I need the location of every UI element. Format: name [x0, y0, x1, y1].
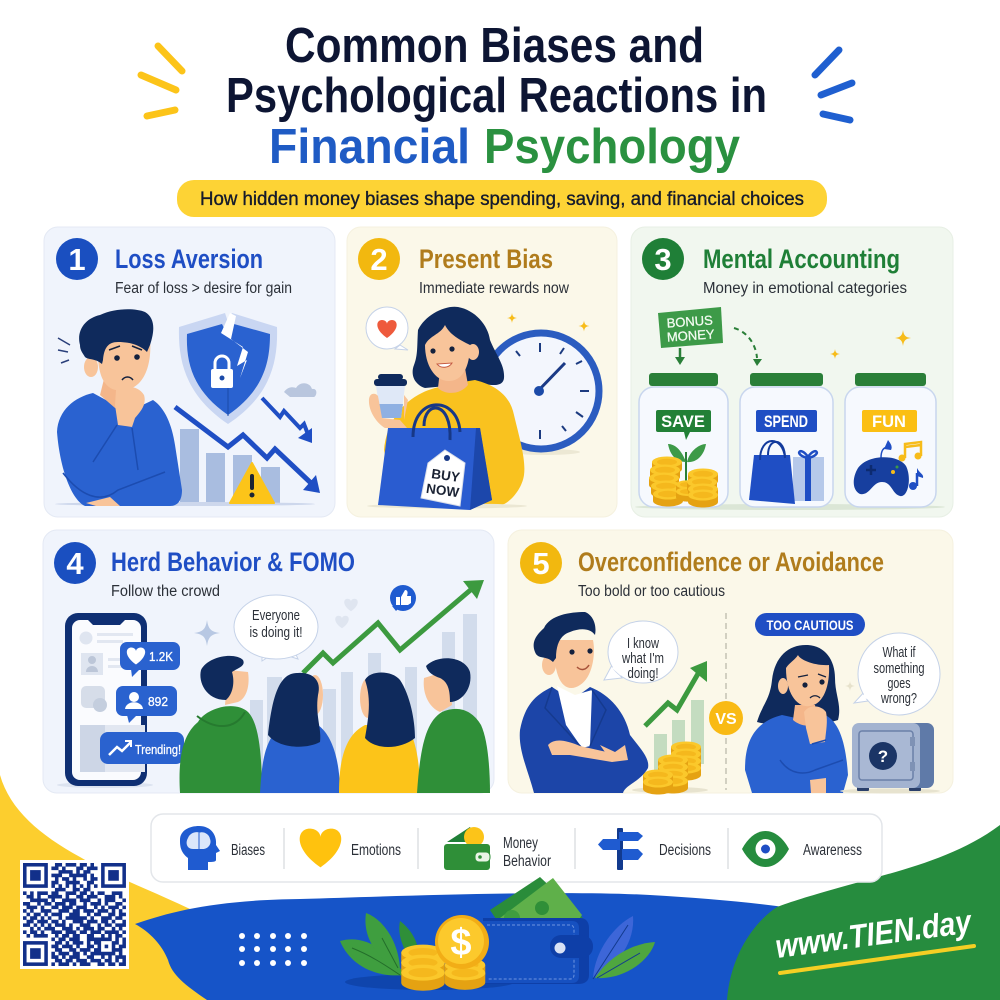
icon: faint sparkle	[845, 681, 855, 691]
icon: phone	[57, 613, 153, 788]
icon: sparkle	[194, 620, 220, 646]
number badge 1	[56, 238, 98, 280]
ground line	[55, 502, 315, 506]
title: Psychology	[484, 120, 740, 174]
text: follow the crowd: Follow the crowd	[111, 583, 220, 600]
icon: buy now tag: BUY	[430, 466, 461, 485]
sign: bonus money: MONEY	[666, 326, 715, 345]
subtitle pill: How hidden money biases shape spending, saving, and financial choices	[200, 189, 804, 210]
badge: likes 1.2K: 1.2K	[149, 649, 173, 664]
subtitle pill	[177, 180, 827, 217]
divider dashed	[725, 613, 727, 790]
decorative yellow burst icon	[141, 46, 182, 116]
icon: like bubble	[390, 585, 416, 611]
bottom band: blue wave	[135, 893, 790, 1000]
callout: i know what i'm doing: what I'm	[621, 651, 664, 667]
person: blue woman	[260, 673, 340, 793]
text: money behavior: Money	[503, 835, 538, 852]
icon: warning triangle	[230, 463, 274, 503]
badge: vs: VS	[715, 711, 737, 728]
panel: present bias	[347, 227, 617, 517]
heading: mental accounting: Mental Accounting	[703, 244, 900, 274]
icon: brain head	[180, 826, 220, 870]
callout: what if something goes wrong: wrong?	[880, 691, 917, 707]
icon: safe	[840, 723, 940, 794]
badge: trending	[100, 732, 184, 764]
callout: everyone is doing it: is doing it!	[250, 625, 302, 641]
number badge 2: 2	[370, 242, 388, 277]
number badge 2	[358, 238, 400, 280]
icon: gold coins	[401, 915, 489, 991]
arrow: bonus down	[675, 348, 685, 365]
icon: worry marks	[58, 338, 70, 363]
icon: buy now tag: NOW	[425, 481, 460, 500]
icon: shopping bag	[367, 405, 527, 510]
icon: heart	[300, 829, 341, 867]
person: yellow woman	[339, 672, 420, 793]
number badge 3	[642, 238, 684, 280]
bars	[250, 614, 477, 793]
text: biases: Biases	[231, 842, 265, 859]
icon: sparkles	[507, 313, 590, 332]
icon: left leaves	[340, 913, 515, 990]
bottom band: green wave	[727, 825, 1000, 1000]
badge: vs	[709, 701, 743, 735]
number badge 1: 1	[68, 242, 86, 277]
decorative blue burst icon	[815, 50, 852, 120]
icon: green wallet	[444, 827, 490, 870]
website url: www.TIEN.day	[773, 902, 975, 965]
text: emotions: Emotions	[351, 842, 401, 859]
number badge 3: 3	[654, 242, 672, 277]
person: woman with coffee	[384, 307, 524, 505]
text: fear of loss: Fear of loss > desire for gain	[115, 280, 292, 297]
icon: buy now tag	[421, 450, 465, 506]
url underline	[780, 946, 974, 973]
icon: eye	[742, 831, 789, 867]
icon: sparkles	[830, 330, 911, 359]
legend bar	[151, 814, 882, 882]
jar: spend	[740, 373, 833, 507]
jar: spend: SPEND	[764, 413, 808, 431]
icon: heart bubble	[366, 307, 408, 350]
heading: loss aversion: Loss Aversion	[115, 244, 263, 274]
panel: overconfidence or avoidance	[508, 530, 953, 794]
panel: herd behavior	[43, 530, 494, 793]
people: crowd	[180, 656, 490, 793]
title: Psychological Reactions in	[226, 69, 767, 123]
badge: followers 892: 892	[148, 694, 168, 709]
icon: gold coins: $	[450, 922, 472, 964]
callout: what if something goes wrong	[854, 633, 940, 715]
icon: coin stacks	[632, 742, 708, 794]
number badge 4: 4	[66, 546, 84, 581]
badge: followers 892	[116, 686, 177, 723]
bars	[180, 429, 280, 503]
jar: fun	[845, 373, 936, 507]
text: awareness: Awareness	[803, 842, 862, 859]
decorative dots	[239, 933, 307, 966]
arrow: dashed curve	[734, 328, 762, 366]
callout: what if something goes wrong: What if	[882, 645, 916, 661]
title: Common Biases and	[285, 19, 704, 73]
person: green man right	[417, 658, 490, 793]
heading: herd behavior: Herd Behavior & FOMO	[111, 547, 355, 577]
badge: likes 1.2K	[120, 642, 180, 677]
title	[226, 19, 767, 174]
bottom band: yellow wave	[0, 775, 260, 1000]
icon: small hearts	[335, 599, 358, 628]
person: worried man	[57, 309, 182, 506]
text: too bold or too cautious: Too bold or too cautious	[578, 583, 725, 600]
pill: too cautious: TOO CAUTIOUS	[766, 618, 854, 633]
sign: bonus money: BONUS	[666, 312, 714, 331]
bars	[654, 700, 704, 778]
jar: save: SAVE	[661, 413, 705, 431]
title: Financial	[269, 120, 470, 174]
arrow: rising green	[645, 661, 707, 726]
callout: i know what i'm doing	[604, 621, 678, 683]
icon: cloud	[284, 383, 316, 397]
text: money behavior: Behavior	[503, 853, 551, 870]
callout: everyone is doing it	[234, 595, 318, 661]
arrow: big falling	[175, 407, 320, 493]
jar: save	[639, 373, 728, 508]
callout: i know what i'm doing: doing!	[628, 666, 658, 682]
callout: everyone is doing it: Everyone	[252, 608, 300, 624]
arrow: rising green	[303, 580, 484, 673]
number badge 5	[520, 542, 562, 584]
icon: coffee cup	[369, 374, 408, 428]
heading: present bias: Present Bias	[419, 244, 553, 274]
callout: i know what i'm doing: I know	[627, 636, 659, 652]
icon: broken shield	[179, 313, 277, 424]
pill: too cautious	[755, 613, 865, 636]
text: immediate rewards: Immediate rewards now	[419, 280, 570, 297]
text: decisions: Decisions	[659, 842, 711, 859]
text: money behavior	[503, 835, 551, 870]
icon: signpost	[598, 828, 643, 870]
text: money in emotional categories: Money in emotional categories	[703, 280, 907, 297]
icon: blue wallet	[483, 918, 593, 984]
person: green hoodie left	[180, 656, 262, 793]
icon: safe: ?	[878, 747, 888, 766]
arrow: small falling	[262, 398, 312, 443]
panel: loss aversion	[44, 227, 335, 517]
badge: trending: Trending!	[135, 742, 181, 757]
heading: overconfidence or avoidance: Overconfidence or Avoidance	[578, 547, 884, 577]
callout: what if something goes wrong: something	[874, 661, 924, 677]
illustration: wallet with coins and leaves	[340, 877, 655, 991]
number badge 5: 5	[532, 546, 550, 581]
icon: money notes	[490, 877, 583, 926]
jar shadows	[635, 504, 945, 510]
callout: what if something goes wrong: goes	[888, 676, 910, 692]
icon: clock	[483, 333, 599, 455]
sign: bonus money	[658, 307, 723, 348]
person: confident man	[520, 612, 648, 793]
person: cautious woman	[745, 645, 848, 793]
QR code	[20, 860, 129, 969]
number badge 4	[54, 542, 96, 584]
jar: fun: FUN	[872, 413, 906, 431]
panel: mental accounting	[631, 227, 953, 517]
icon: right leaves	[593, 916, 655, 979]
